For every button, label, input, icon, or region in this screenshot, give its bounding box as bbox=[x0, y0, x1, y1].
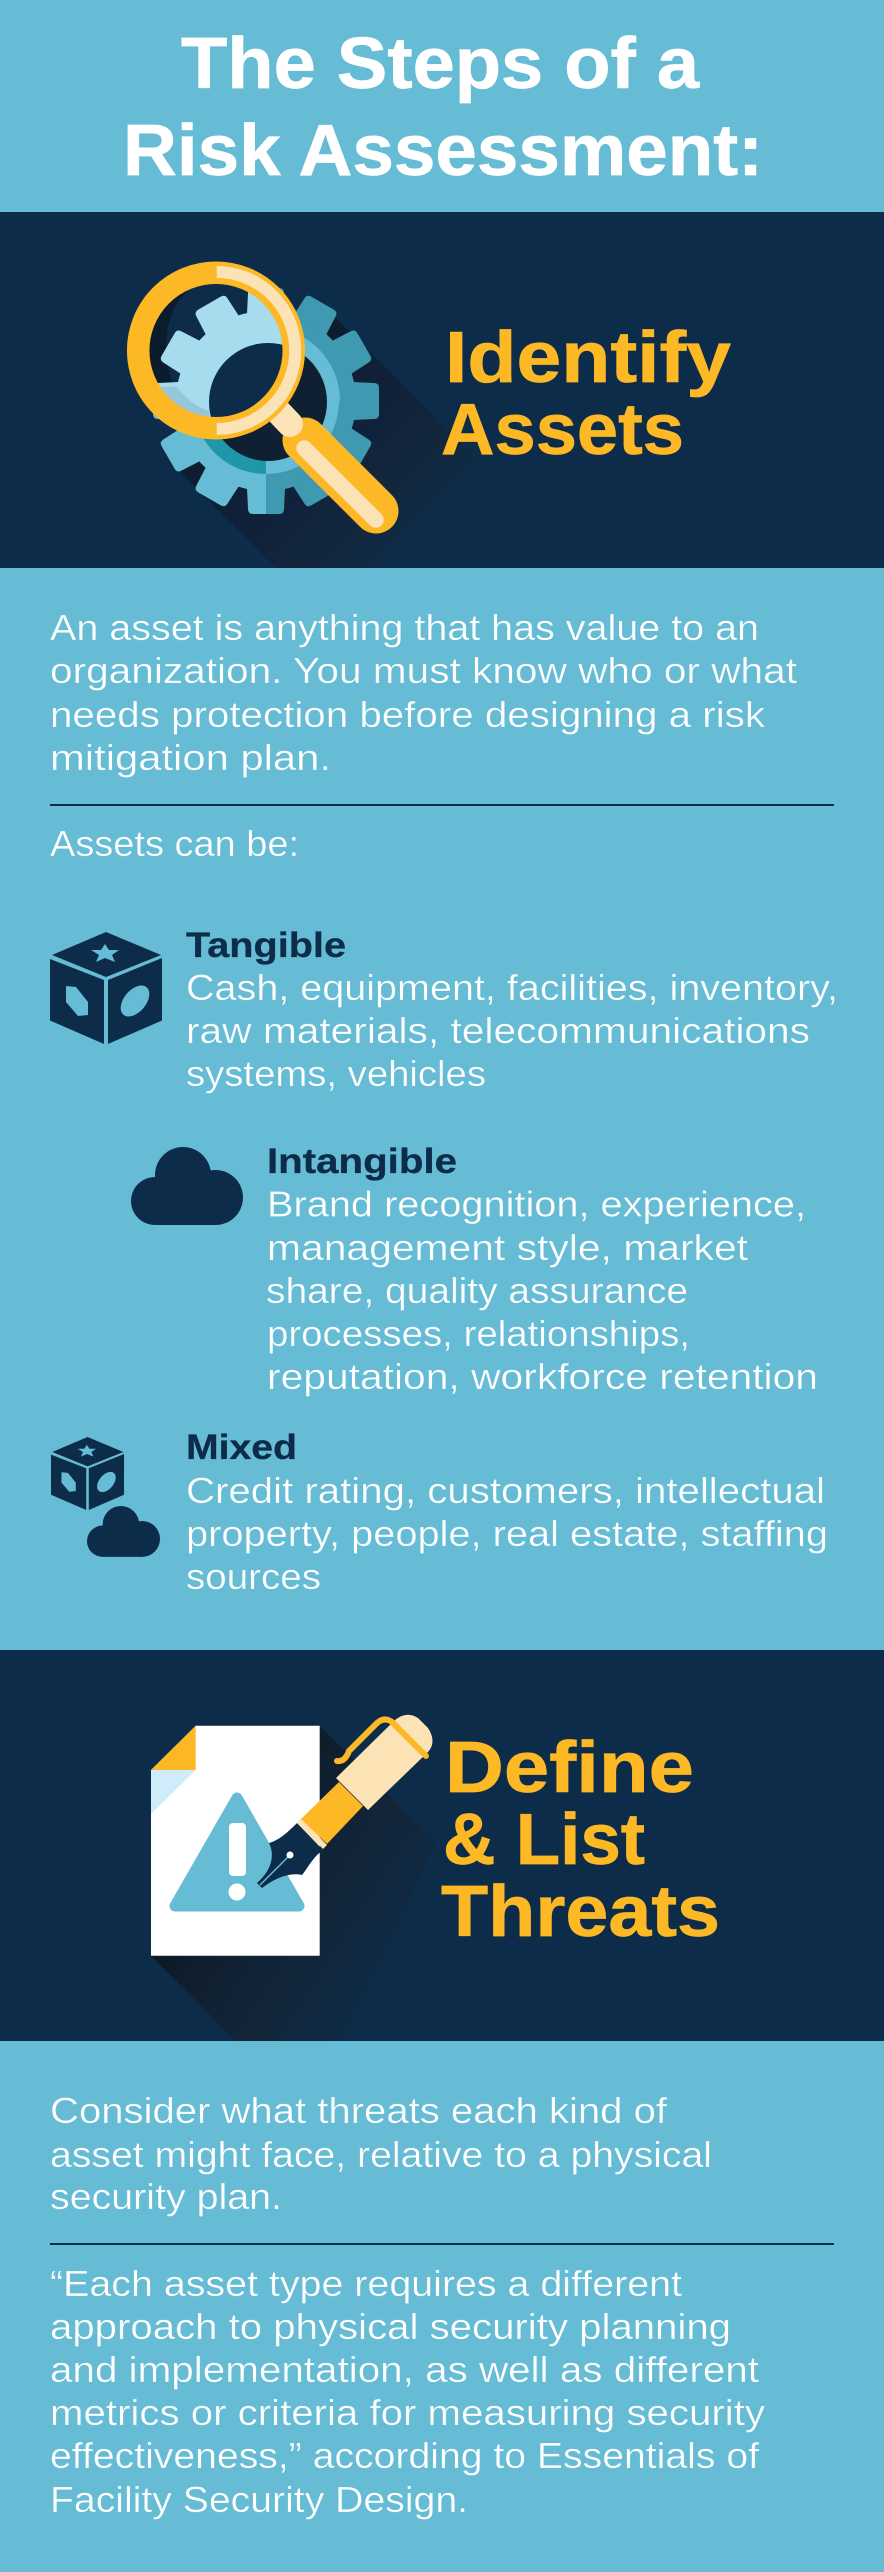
icon: small cube bbox=[51, 1437, 124, 1510]
panel: define and list threats banner bbox=[0, 1650, 884, 2041]
label: tangible: Tangible bbox=[186, 926, 346, 965]
label: intangible: reputation, workforce retention bbox=[267, 1356, 818, 1397]
label: intangible: processes, relationships, bbox=[267, 1313, 690, 1354]
label: mixed: Mixed bbox=[186, 1428, 297, 1467]
text block: asset definition: mitigation plan. bbox=[50, 737, 331, 778]
label: intangible: management style, market bbox=[267, 1227, 748, 1268]
label: intangible: Brand recognition, experience, bbox=[267, 1184, 806, 1224]
label: tangible: Cash, equipment, facilities, inventory, bbox=[186, 967, 838, 1008]
text block: quote: and implementation, as well as different bbox=[50, 2349, 759, 2390]
label: mixed bbox=[186, 1428, 828, 1597]
icon: magnifying glass over gear bbox=[138, 272, 480, 568]
label: intangible: share, quality assurance bbox=[266, 1270, 688, 1311]
title: Risk Assessment: bbox=[123, 111, 763, 191]
text block: quote: metrics or criteria for measuring security bbox=[50, 2392, 765, 2433]
label: mixed: sources bbox=[186, 1556, 321, 1597]
label: intangible bbox=[266, 1142, 818, 1397]
item: mixed bbox=[51, 1428, 828, 1597]
text block: asset definition: organization. You must know who or what bbox=[50, 650, 797, 691]
icon: document with warning and pen bbox=[151, 1715, 436, 2041]
text block: asset definition bbox=[50, 607, 797, 778]
text block: quote bbox=[50, 2263, 765, 2520]
text block: asset definition: An asset is anything that has value to an bbox=[50, 607, 759, 648]
heading: define and list threats: Threats bbox=[441, 1872, 720, 1952]
text block: quote: approach to physical security planning bbox=[50, 2306, 731, 2347]
title: The Steps of a bbox=[181, 24, 700, 104]
icon: cube bbox=[50, 932, 162, 1044]
text block: threats intro: asset might face, relative to a physical bbox=[50, 2134, 712, 2175]
heading: define and list threats: & List bbox=[443, 1800, 645, 1880]
text block: threats intro: security plan. bbox=[50, 2176, 282, 2217]
label: tangible: raw materials, telecommunications bbox=[186, 1010, 810, 1051]
text block: quote: effectiveness,” according to Essentials of bbox=[50, 2435, 760, 2476]
heading: define and list threats bbox=[441, 1728, 720, 1952]
panel: identify assets banner bbox=[0, 212, 884, 568]
icon: cloud bbox=[131, 1147, 243, 1225]
label: tangible: systems, vehicles bbox=[186, 1053, 486, 1094]
label: tangible bbox=[186, 926, 838, 1094]
text block: threats intro: Consider what threats each kind of bbox=[50, 2090, 668, 2131]
text block: quote: Facility Security Design. bbox=[50, 2479, 468, 2520]
heading: identify assets: Assets bbox=[441, 390, 684, 470]
heading: define and list threats: Define bbox=[445, 1728, 694, 1808]
item: tangible bbox=[50, 926, 838, 1094]
label: intangible: Intangible bbox=[267, 1142, 457, 1181]
heading: identify assets: Identify bbox=[445, 318, 731, 398]
text: assets can be: Assets can be: bbox=[50, 823, 299, 864]
label: mixed: property, people, real estate, staffing bbox=[186, 1513, 828, 1554]
icon: small cloud bbox=[87, 1506, 160, 1557]
heading: identify assets bbox=[441, 318, 731, 470]
text block: quote: “Each asset type requires a different bbox=[50, 2263, 682, 2304]
title bbox=[123, 24, 763, 191]
label: mixed: Credit rating, customers, intellectual bbox=[186, 1470, 825, 1511]
text block: asset definition: needs protection before designing a risk bbox=[50, 694, 766, 735]
text block: threats intro bbox=[50, 2090, 712, 2217]
item: intangible bbox=[131, 1142, 818, 1397]
